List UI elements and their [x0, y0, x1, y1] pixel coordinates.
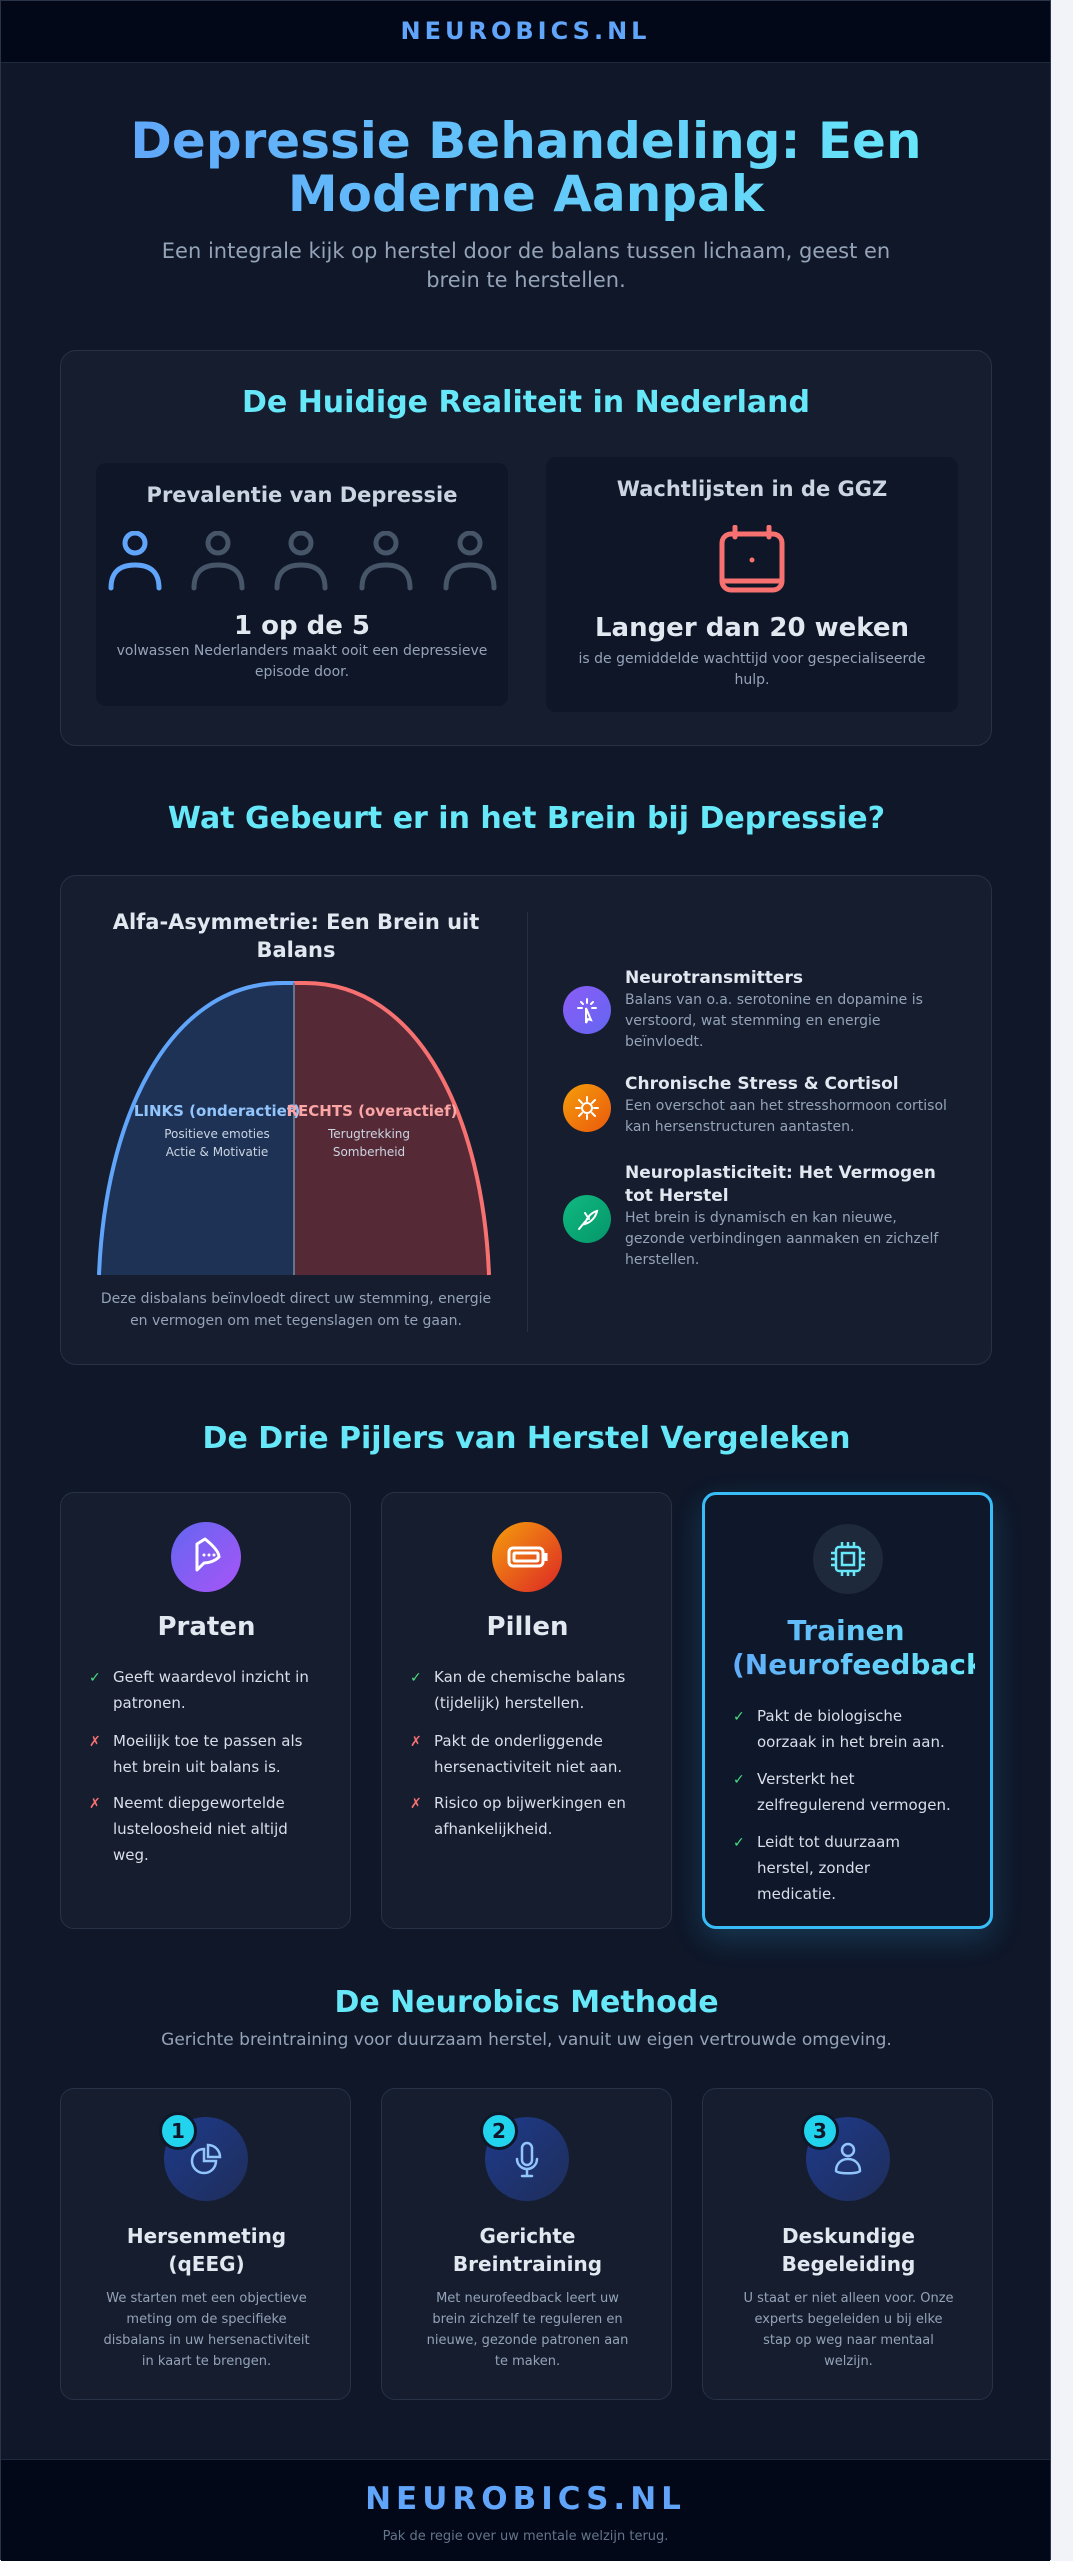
title: trainen [705, 1614, 975, 1682]
chart caption: Deze disbalans beïnvloedt direct uw stemming, energie en vermogen om met tegenslagen om te gaan. [101, 1291, 491, 1329]
card: trainen (highlighted): ✓ [733, 1772, 745, 1788]
chart: alpha asymmetry [97, 910, 491, 1329]
card: pillen: ✗ [410, 1734, 422, 1750]
bullets: trainen: ✓ [733, 1709, 745, 1725]
card: pillen: Risico op bijwerkingen en afhankelijkheid. [434, 1794, 626, 1838]
card: praten [60, 1492, 351, 1929]
waiting text: is de gemiddelde wachttijd voor gespecialiseerde hulp. [579, 651, 925, 688]
hemispheres: RECHTS (overactief) [286, 1102, 458, 1120]
card: praten: Neemt diepgewortelde lusteloosheid niet altijd weg. [113, 1794, 288, 1864]
bullets: pillen: Kan de chemische balans (tijdelijk) herstellen. [434, 1668, 625, 1712]
card: praten: ✗ [89, 1734, 101, 1750]
hemispheres [97, 981, 491, 1276]
hemispheres: Positieve emoties [164, 1127, 270, 1141]
card: step 2 [381, 2088, 672, 2400]
card: trainen (highlighted): Leidt tot duurzaam herstel, zonder medicatie. [757, 1833, 900, 1903]
icons: people [108, 531, 496, 590]
card: prevalence [96, 463, 508, 706]
hemispheres: Somberheid [333, 1145, 405, 1159]
panel: brain [60, 875, 992, 1365]
text: neuroplasticity [625, 1163, 939, 1268]
hemispheres: Actie & Motivatie [166, 1145, 268, 1159]
stat: weeks: Langer dan 20 weken [595, 613, 909, 643]
text: step 2: Met neurofeedback leert uw brein zichzelf te reguleren en nieuwe, gezonde patronen aan te maken. [427, 2291, 628, 2369]
badge 2 [480, 2112, 518, 2150]
item: neuroplasticity [563, 1163, 939, 1268]
card: praten: ✗ [89, 1796, 101, 1812]
text: step 3: U staat er niet alleen voor. Onze experts begeleiden u bij elke [743, 2291, 954, 2327]
card: pillen [381, 1492, 672, 1929]
icon: sun [563, 1084, 611, 1132]
heading: brain: Wat Gebeurt er in het Brein bij Depressie? [168, 801, 885, 836]
title: step 1 [127, 2224, 286, 2276]
heading: method: De Neurobics Methode [334, 1985, 719, 2020]
chart title: Alfa-Asymmetrie: Een Brein uit Balans [113, 910, 479, 962]
badge 1 [159, 2112, 197, 2150]
text: step 1: We starten met een objectieve meting om de specifieke disbalans in uw hersenactiviteit in kaart te brengen. [103, 2291, 310, 2369]
text: neurotransmitters: Neurotransmitters [625, 968, 803, 988]
card: trainen (highlighted): Versterkt het zelfregulerend vermogen. [757, 1770, 951, 1814]
badge 1: 1 [171, 2119, 185, 2143]
icon: calendar [720, 525, 784, 592]
title: step 2: Gerichte [480, 2224, 575, 2248]
icon: chip [813, 1524, 883, 1594]
card: step 1 [60, 2088, 351, 2400]
method subtitle: Gerichte breintraining voor duurzaam herstel, vanuit uw eigen vertrouwde omgeving. [161, 2030, 892, 2050]
icon: step 1 [164, 2117, 248, 2201]
title: step 3 [782, 2224, 915, 2276]
panel: current reality [60, 350, 992, 746]
waiting heading: Wachtlijsten in de GGZ [617, 477, 887, 501]
item: neurotransmitters [563, 968, 923, 1050]
subtitle: Een integrale kijk op herstel door de balans tussen lichaam, geest en brein te herstellen. [162, 239, 890, 292]
text: neurotransmitters: Balans van o.a. serotonine en dopamine is verstoord, wat stemming en energie beïnvloedt. [625, 992, 923, 1050]
hemispheres: LINKS (onderactief) [134, 1102, 300, 1120]
title: pillen: Pillen [487, 1612, 568, 1642]
heading: pillars: De Drie Pijlers van Herstel Vergeleken [203, 1421, 850, 1456]
badge 2: 2 [492, 2119, 506, 2143]
text: step 3: stap op weg naar mentaal welzijn. [763, 2333, 934, 2369]
text: neuroplasticity: Het brein is dynamisch en kan nieuwe, gezonde verbindingen aanmaken en zichzelf herstellen. [625, 1210, 938, 1268]
badge 3: 3 [813, 2119, 827, 2143]
title: step 1: Hersenmeting [127, 2224, 286, 2248]
hemispheres: Terugtrekking [327, 1127, 410, 1141]
icon: step 3 [806, 2117, 890, 2201]
card: praten: Moeilijk toe te passen als het brein uit balans is. [113, 1732, 302, 1776]
bullets: praten: Geeft waardevol inzicht in patronen. [113, 1668, 309, 1712]
icon: plant [563, 1195, 611, 1243]
text: step 3 [743, 2291, 954, 2369]
card: pillen: ✗ [410, 1796, 422, 1812]
text: neuroplasticity: Neuroplasticiteit: Het Vermogen tot Herstel [625, 1163, 936, 1206]
icon: chat [171, 1522, 241, 1592]
icon: neurotransmitters [563, 986, 611, 1034]
text: stress: Chronische Stress & Cortisol [625, 1074, 899, 1094]
footer logo: NEUROBICS.NL [365, 2481, 686, 2517]
icon: battery [492, 1522, 562, 1592]
card: trainen (highlighted) [702, 1492, 993, 1929]
title: step 1: (qEEG) [168, 2252, 245, 2276]
bullets: trainen: Pakt de biologische oorzaak in het brein aan. [757, 1707, 945, 1751]
card: waiting lists [546, 457, 958, 712]
heading: reality: De Huidige Realiteit in Nederland [242, 385, 810, 420]
title: praten: Praten [158, 1612, 256, 1642]
card: trainen (highlighted): ✓ [733, 1835, 745, 1851]
footer [1, 2459, 1050, 2561]
item: stress [563, 1074, 947, 1135]
text: stress [625, 1074, 947, 1135]
bullets: praten: ✓ [89, 1670, 101, 1686]
header bar [1, 1, 1050, 63]
stat: 1 op de 5: 1 op de 5 [234, 611, 370, 641]
title: Depressie Behandeling: Een Moderne Aanpak [130, 112, 922, 223]
badge 3 [801, 2112, 839, 2150]
title: step 3: Deskundige [782, 2224, 915, 2248]
bullets: pillen: ✓ [410, 1670, 422, 1686]
prevalence heading: Prevalentie van Depressie [147, 483, 457, 507]
card: step 3 [702, 2088, 993, 2400]
title: step 2: Breintraining [453, 2252, 602, 2276]
prevalence text: volwassen Nederlanders maakt ooit een depressieve episode door. [117, 643, 487, 680]
card: pillen: Pakt de onderliggende hersenactiviteit niet aan. [434, 1732, 622, 1776]
text: stress: Een overschot aan het stresshormoon cortisol kan hersenstructuren aantasten. [625, 1098, 947, 1135]
title: step 2 [453, 2224, 602, 2276]
icon: step 2 [485, 2117, 569, 2201]
title: step 3: Begeleiding [782, 2252, 915, 2276]
footer tagline: Pak de regie over uw mentale welzijn terug. [383, 2529, 668, 2544]
header logo: NEUROBICS.NL [401, 17, 650, 45]
